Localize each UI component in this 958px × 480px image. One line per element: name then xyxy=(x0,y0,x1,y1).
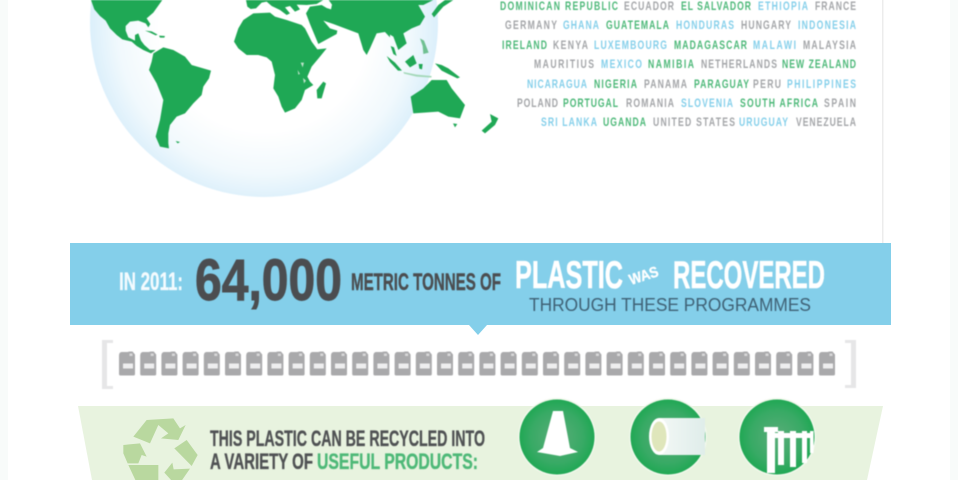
row 2: INDONESIA xyxy=(798,20,857,32)
panel heading xyxy=(210,426,485,474)
row 3: LUXEMBOURG xyxy=(594,40,667,52)
East Asia and Indochina xyxy=(370,0,433,50)
world globe map xyxy=(90,0,498,197)
row 7 xyxy=(541,117,857,129)
African lakes xyxy=(298,63,306,83)
country list xyxy=(500,1,857,129)
Madagascar xyxy=(317,82,326,98)
icon: traffic cone xyxy=(518,398,596,476)
right bracket xyxy=(845,340,856,388)
bracketed row of plastic jugs xyxy=(102,340,856,389)
row 4: MEXICO xyxy=(601,59,642,71)
North and Central America xyxy=(91,0,162,53)
Sumatra xyxy=(387,56,402,71)
South America xyxy=(149,47,211,148)
Americas xyxy=(91,0,211,148)
left bracket xyxy=(102,340,113,389)
icon: plastic pipe xyxy=(629,398,707,476)
row 6: SLOVENIA xyxy=(681,98,734,110)
heading line 2 dark: A VARIETY OF xyxy=(210,449,313,474)
panel background xyxy=(78,406,883,480)
Philippines xyxy=(420,38,429,54)
New Zealand xyxy=(482,114,498,133)
row 4: NETHERLANDS xyxy=(701,59,777,71)
recycled products panel xyxy=(78,398,883,480)
row 1 xyxy=(500,1,856,13)
row 5: PARAGUAY xyxy=(694,79,749,91)
Africa xyxy=(234,13,327,113)
Europe xyxy=(246,0,323,15)
was word: WAS xyxy=(627,263,661,289)
row 6: PORTUGAL xyxy=(563,98,618,110)
globe sphere xyxy=(90,0,438,197)
row 3: MADAGASCAR xyxy=(674,40,748,52)
jug icons xyxy=(119,352,835,376)
row 3: MALAWI xyxy=(753,40,796,52)
row 2: GERMANY xyxy=(505,20,557,32)
subheading: THROUGH THESE PROGRAMMES xyxy=(529,295,811,315)
row 5 xyxy=(527,79,856,91)
Middle East, Arabia and India xyxy=(306,0,390,55)
Asia Pacific xyxy=(370,0,498,133)
row 1: DOMINICAN REPUBLIC xyxy=(500,1,619,13)
Caribbean islands xyxy=(145,31,165,38)
row 6: SPAIN xyxy=(824,98,856,110)
row 3: KENYA xyxy=(553,40,589,52)
Borneo xyxy=(405,55,417,67)
row 7: VENEZUELA xyxy=(796,117,857,129)
row 6: SOUTH AFRICA xyxy=(740,98,819,110)
row 1: FRANCE xyxy=(815,1,856,13)
icon: recycling symbol xyxy=(123,418,198,480)
Australia xyxy=(411,80,465,118)
row 3: IRELAND xyxy=(502,40,547,52)
row 1: ETHIOPIA xyxy=(758,1,809,13)
row 1: ECUADOR xyxy=(624,1,675,13)
row 7: SRI LANKA xyxy=(541,117,598,129)
Sulawesi xyxy=(419,64,423,69)
row 5: PANAMA xyxy=(644,79,688,91)
recovered word: RECOVERED xyxy=(673,254,825,297)
row 1: EL SALVADOR xyxy=(681,1,752,13)
heading line 2 green: USEFUL PRODUCTS: xyxy=(317,449,478,474)
row 2: HUNGARY xyxy=(741,20,791,32)
row 4: MAURITIUS xyxy=(534,59,594,71)
heading line 1: THIS PLASTIC CAN BE RECYCLED INTO xyxy=(210,426,485,451)
row 7: URUGUAY xyxy=(739,117,788,129)
icon: plastic fence xyxy=(738,398,816,476)
row 2 xyxy=(505,20,857,32)
unit label: METRIC TONNES OF xyxy=(351,269,501,296)
row 7: UGANDA xyxy=(603,117,647,129)
big number: 64,000 xyxy=(195,248,342,313)
headline banner xyxy=(70,243,891,335)
row 4: NAMIBIA xyxy=(648,59,695,71)
condensed country rows xyxy=(500,1,857,129)
Japan xyxy=(432,0,453,17)
row 5: NICARAGUA xyxy=(527,79,588,91)
banner background with pointer xyxy=(70,243,891,335)
row 5: PERU xyxy=(753,79,781,91)
row 5: PHILIPPINES xyxy=(787,79,856,91)
New Guinea xyxy=(435,63,460,78)
year label: IN 2011: xyxy=(119,268,183,296)
Java and lesser islands xyxy=(403,72,432,78)
row 6: ROMANIA xyxy=(626,98,675,110)
row 4: NEW ZEALAND xyxy=(782,59,856,71)
row 2: GUATEMALA xyxy=(606,20,670,32)
Africa and western Eurasia xyxy=(234,0,390,113)
row 2: HONDURAS xyxy=(676,20,734,32)
row 6 xyxy=(517,98,856,110)
row 4 xyxy=(534,59,856,71)
row 5: NIGERIA xyxy=(594,79,638,91)
row 3: MALAYSIA xyxy=(803,40,857,52)
continents xyxy=(91,0,498,148)
Malay peninsula xyxy=(391,46,397,56)
Falkland Islands xyxy=(176,141,180,143)
plastic word: PLASTIC xyxy=(515,254,623,297)
row 7: UNITED STATES xyxy=(653,117,735,129)
banner text xyxy=(119,248,825,315)
Tasmania xyxy=(453,123,457,127)
row 3 xyxy=(502,40,857,52)
row 2: GHANA xyxy=(563,20,600,32)
row 6: POLAND xyxy=(517,98,558,110)
